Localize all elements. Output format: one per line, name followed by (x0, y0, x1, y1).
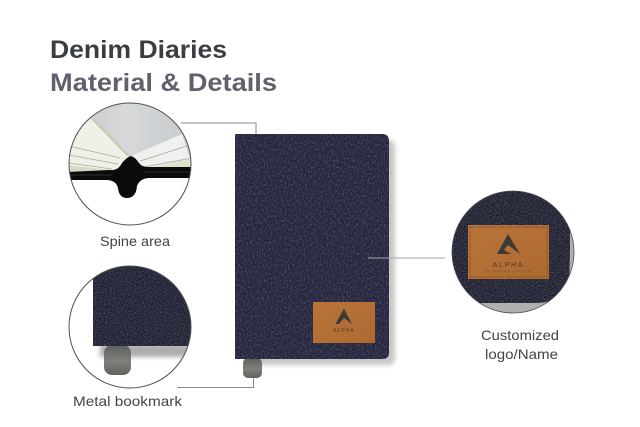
shadow (100, 344, 196, 357)
leather patch: ALPHA (333, 328, 355, 334)
label: customized logo/name: Customized (481, 327, 559, 343)
cloth corner (93, 266, 190, 346)
circle outline (452, 191, 574, 313)
connector: metal bookmark (177, 378, 254, 388)
logo mark (497, 234, 520, 254)
cloth (450, 188, 570, 303)
black spine (66, 156, 194, 198)
label: customized logo/name: logo/Name (485, 346, 558, 362)
leather patch large (468, 225, 549, 279)
label: metal bookmark: Metal bookmark (73, 393, 183, 409)
detail circle: customized logo (450, 188, 576, 314)
lower white area (66, 175, 194, 227)
label: customized logo/name (481, 327, 559, 362)
connector: spine area (181, 123, 256, 134)
label: spine area: Spine area (100, 233, 170, 249)
bookmark on notebook (243, 358, 262, 378)
connector: logo (368, 257, 445, 259)
detail circle: customized logo: BUSINESS SYSTEM (485, 268, 532, 274)
stitching (470, 227, 547, 277)
title: Denim Diaries (50, 36, 227, 64)
notebook cover (235, 134, 389, 359)
bookmark charm (104, 345, 131, 375)
title: Material & Details (50, 69, 277, 97)
infographic canvas (52, 40, 574, 406)
title (50, 36, 277, 97)
leather patch (313, 302, 375, 343)
circle outline (69, 266, 191, 388)
circle outline (69, 103, 191, 225)
detail circle: spine area (66, 103, 194, 227)
brand text: ALPHA (493, 262, 524, 269)
page shadow crescent (480, 232, 574, 313)
notebook shadow (246, 140, 395, 365)
left pages (66, 118, 129, 170)
notebook (235, 134, 395, 378)
detail circle: metal bookmark (69, 262, 197, 388)
right pages (132, 134, 190, 167)
page fan (90, 104, 190, 158)
